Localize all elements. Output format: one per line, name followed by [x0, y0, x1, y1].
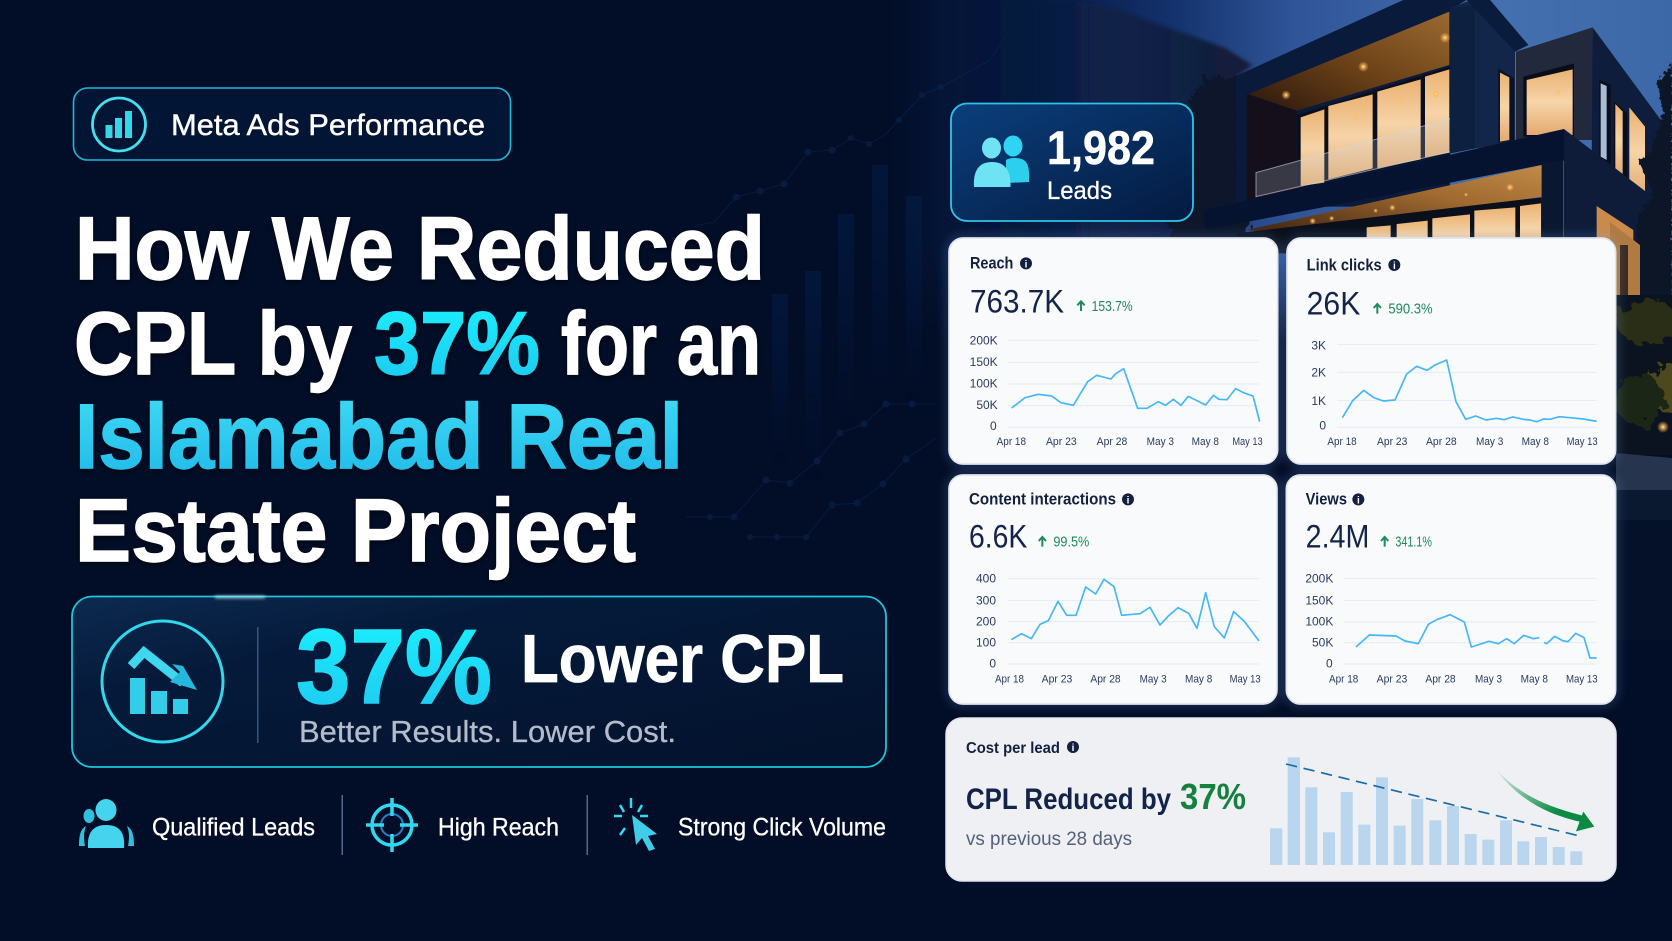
card: Reach: 763.7K — [970, 284, 1064, 320]
panel: 37% lower CPL: 37% — [296, 608, 492, 726]
icon: info: i — [1127, 495, 1130, 506]
line chart: Apr 28 — [1090, 674, 1121, 686]
headline title: for an — [561, 293, 761, 393]
icon: info: i — [1072, 743, 1075, 754]
background decorative bars and trend lines — [686, 30, 1010, 540]
card: Content interactions: 6.6K — [969, 519, 1027, 555]
icon: up arrow — [1077, 301, 1085, 311]
panel: 37% lower CPL: Better Results. Lower Cost. — [299, 714, 676, 749]
icon: cursor click — [614, 798, 657, 851]
line chart: 1K — [1311, 394, 1326, 408]
icon: info: i — [1393, 261, 1396, 272]
line chart: 200 — [976, 615, 996, 629]
feature: High Reach: High Reach — [438, 814, 559, 842]
card: Link clicks — [1287, 238, 1616, 464]
right block — [1516, 27, 1593, 140]
card: Views: 2.4M — [1306, 519, 1369, 555]
icon: info — [1352, 493, 1364, 506]
lower soffit — [1247, 165, 1542, 235]
panel: cost per lead: vs previous 28 days — [966, 829, 1132, 850]
line chart: 150K — [1305, 593, 1333, 607]
icon: up arrow — [1381, 537, 1388, 547]
icon: two people — [974, 136, 1029, 187]
divider — [586, 795, 588, 855]
photo: modern house at night — [1190, 0, 1672, 300]
line chart: Apr 28 — [1425, 674, 1456, 686]
headline title: Estate Project — [75, 480, 636, 580]
badge: Meta Ads Performance: Meta Ads Performance — [171, 109, 485, 142]
line chart: 2K — [1311, 366, 1326, 380]
trees left of house — [1190, 75, 1237, 240]
line chart: May 8 — [1522, 436, 1549, 448]
line chart: Apr 18 — [997, 436, 1026, 448]
line chart: May 3 — [1475, 674, 1502, 686]
line chart: Apr 18 — [1329, 674, 1358, 686]
line chart: 200K — [970, 333, 998, 347]
stat card: 1,982 leads: 1,982 — [1047, 121, 1155, 174]
feature: Strong Click Volume — [614, 798, 886, 851]
ceiling lights — [1281, 32, 1561, 224]
icon: falling bars in circle — [102, 621, 223, 742]
line chart: 100K — [1305, 615, 1333, 629]
icon: info: i — [1357, 495, 1360, 506]
feature: Qualified Leads — [79, 799, 315, 848]
card: Link clicks: 26K — [1307, 285, 1360, 321]
icon: up arrow — [1039, 537, 1046, 547]
line chart: May 3 — [1476, 436, 1503, 448]
feature: Strong Click Volume: Strong Click Volume — [678, 814, 886, 842]
line chart: 50K — [1312, 635, 1333, 649]
line chart: May 13 — [1566, 674, 1598, 686]
card: Content interactions: Content interactions — [969, 490, 1116, 509]
panel: cost per lead: Cost per lead — [966, 740, 1060, 757]
dashed trend line — [1286, 764, 1582, 837]
line chart: 100K — [970, 377, 998, 391]
garden, bushes and pavement — [1610, 222, 1672, 640]
trees right of house — [1637, 63, 1672, 300]
panel: cost per lead: 37% — [1180, 776, 1246, 817]
card: Views: 341.1% — [1395, 535, 1432, 551]
headline title: 37% — [374, 293, 540, 393]
icon: info — [1020, 257, 1032, 270]
line chart: May 13 — [1567, 436, 1598, 448]
inner dark wall — [1247, 94, 1297, 200]
line chart: 400 — [976, 571, 996, 585]
line chart: 0 — [990, 419, 997, 433]
window panes — [1301, 109, 1324, 186]
feature: Qualified Leads: Qualified Leads — [152, 814, 315, 842]
line chart: Apr 18 — [995, 674, 1024, 686]
line chart — [976, 571, 1261, 686]
card: Reach: Reach — [970, 254, 1013, 273]
line chart: May 8 — [1192, 436, 1219, 448]
line chart: May 8 — [1521, 674, 1548, 686]
card: Link clicks: Link clicks — [1307, 255, 1382, 274]
upper block front face — [1236, 0, 1467, 207]
divider — [342, 795, 343, 855]
arrow: green downward curve — [1495, 768, 1594, 831]
icon: people — [79, 799, 134, 848]
line chart: 3K — [1311, 338, 1326, 352]
line chart: 50K — [976, 398, 998, 412]
wood soffit — [1248, 12, 1449, 111]
line chart: May 13 — [1230, 674, 1261, 686]
card: Link clicks: 590.3% — [1388, 302, 1433, 318]
line chart: 200K — [1305, 571, 1333, 585]
headline title: Islamabad Real — [75, 386, 683, 488]
card: Content interactions — [949, 475, 1277, 704]
line chart: May 3 — [1147, 436, 1174, 448]
line chart: 0 — [1326, 656, 1333, 670]
icon: info — [1388, 259, 1400, 272]
card: Reach — [949, 238, 1278, 464]
line chart: 0 — [989, 656, 996, 670]
tall column and side face — [1450, 0, 1528, 153]
headline title — [74, 198, 765, 580]
panel: cost per lead — [946, 718, 1616, 881]
card: Reach: 153.7% — [1092, 299, 1133, 315]
line chart: Apr 23 — [1377, 674, 1407, 686]
stat card: 1,982 leads — [951, 104, 1193, 221]
line chart: Apr 18 — [1327, 436, 1357, 448]
dark clouds — [960, 0, 1252, 240]
card glows — [949, 238, 1616, 704]
line chart — [970, 333, 1263, 448]
line chart: May 13 — [1232, 436, 1263, 448]
line chart — [1305, 571, 1598, 686]
bar chart with trend — [1270, 757, 1594, 865]
balcony glass — [1256, 118, 1451, 197]
line chart: May 8 — [1185, 674, 1212, 686]
badge: Meta Ads Performance — [74, 88, 510, 160]
stat card: 1,982 leads: Leads — [1047, 177, 1112, 205]
feature: High Reach — [366, 798, 559, 852]
line chart: May 3 — [1140, 674, 1167, 686]
lower slab — [1204, 129, 1564, 230]
background trees left of house — [1164, 76, 1253, 270]
headline title: How We Reduced — [75, 198, 765, 298]
panel: 37% lower CPL — [72, 596, 886, 767]
icon: bar chart in circle — [92, 98, 146, 151]
night sky — [880, 0, 1672, 340]
icon: info: i — [1025, 259, 1028, 270]
line chart: 300 — [976, 593, 996, 607]
line chart: 0 — [1319, 418, 1326, 432]
divider — [257, 627, 258, 743]
icon: target — [366, 798, 418, 852]
card: Content interactions: 99.5% — [1053, 535, 1090, 551]
panel: 37% lower CPL: Lower CPL — [521, 621, 844, 697]
window wall backing — [1297, 67, 1450, 188]
line chart: 150K — [970, 355, 998, 369]
panel: cost per lead: CPL Reduced by — [966, 783, 1171, 816]
line chart: Apr 23 — [1046, 436, 1077, 448]
card: Views — [1286, 475, 1616, 704]
icon: up arrow — [1374, 304, 1381, 314]
line chart: Apr 23 — [1377, 436, 1407, 448]
card: Views: Views — [1306, 490, 1347, 509]
headline title: CPL by — [74, 293, 352, 393]
icon: info — [1122, 493, 1134, 506]
line chart — [1311, 338, 1598, 448]
line chart: 100 — [976, 635, 996, 649]
line chart: Apr 28 — [1426, 436, 1457, 448]
line chart: Apr 28 — [1097, 436, 1127, 448]
line chart: Apr 23 — [1042, 674, 1072, 686]
icon: info — [1067, 741, 1079, 754]
